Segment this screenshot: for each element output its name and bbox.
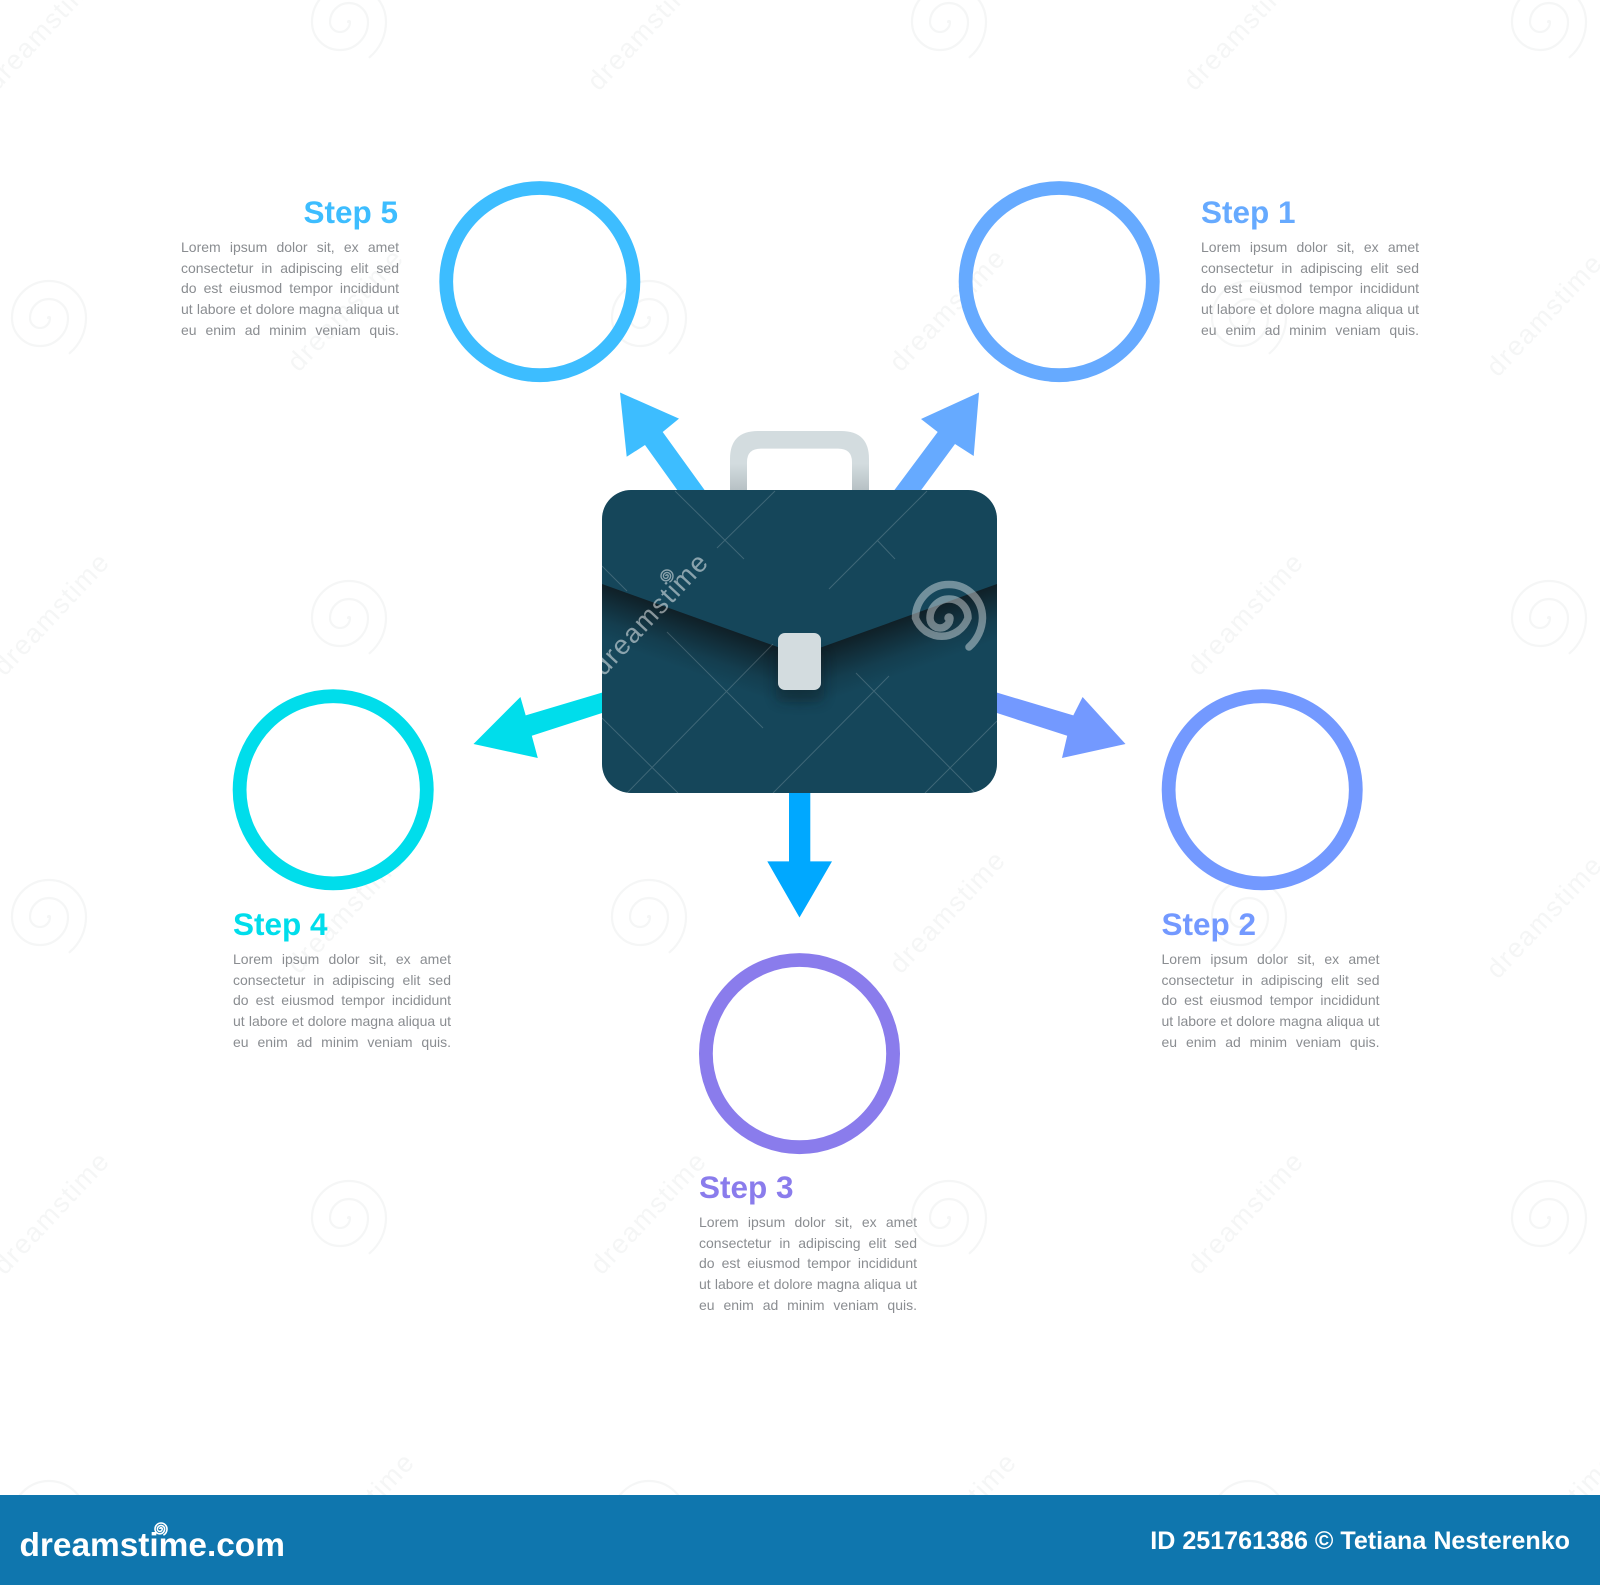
body: step 3: Lorem ipsum dolor sit, ex amet: [699, 1214, 917, 1230]
footer logo text: dreamstime.com: [20, 1527, 285, 1564]
background watermark text: dreamstime: [281, 845, 410, 979]
body: step 3: [699, 1214, 917, 1313]
body: step 2: consectetur in adipiscing elit sed: [1162, 972, 1380, 988]
body: step 5: do est eiusmod tempor incididunt: [181, 280, 399, 296]
body: step 4: [233, 951, 451, 1050]
arrow: to step 4: [474, 692, 604, 758]
footer logo spiral: [154, 1522, 168, 1536]
body: step 4: ut labore et dolore magna aliqua ut: [233, 1013, 451, 1029]
arrow: to step 2: [995, 692, 1126, 758]
body: step 2: Lorem ipsum dolor sit, ex amet: [1162, 951, 1380, 967]
text block: step 5: [181, 194, 399, 338]
body: step 5: ut labore et dolore magna aliqua ut: [181, 301, 399, 317]
background watermark text: dreamstime: [894, 1447, 1023, 1581]
background watermark text: dreamstime: [883, 845, 1012, 979]
body: step 4: consectetur in adipiscing elit sed: [233, 972, 451, 988]
body: step 1: Lorem ipsum dolor sit, ex amet: [1201, 239, 1419, 255]
body: step 2: do est eiusmod tempor incididunt: [1162, 992, 1380, 1008]
body: step 5: eu enim ad minim veniam quis.: [181, 322, 399, 338]
background watermark text: dreamstime: [1181, 1146, 1310, 1280]
background watermark text: dreamstime: [883, 243, 1012, 377]
briefcase watermark lines: [602, 491, 997, 793]
briefcase watermark spiral: [916, 584, 982, 647]
circle: step 2: [1169, 696, 1356, 883]
heading: step 3: Step 3: [699, 1169, 794, 1205]
briefcase body: [602, 490, 997, 793]
text block: step 1: [1201, 194, 1419, 338]
body: step 2: ut labore et dolore magna aliqua ut: [1162, 1013, 1380, 1029]
background watermark text: dreamstime: [1181, 547, 1310, 681]
body: step 4: eu enim ad minim veniam quis.: [233, 1034, 451, 1050]
body: step 1: do est eiusmod tempor incididunt: [1201, 280, 1419, 296]
body: step 5: Lorem ipsum dolor sit, ex amet: [181, 239, 399, 255]
body: step 1: ut labore et dolore magna aliqua ut: [1201, 301, 1419, 317]
circle: step 4: [240, 696, 427, 883]
text block: step 2: [1162, 906, 1380, 1050]
body: step 1: [1201, 239, 1419, 338]
briefcase flap shadow: [602, 584, 997, 686]
briefcase watermark small spiral: [661, 570, 673, 582]
body: step 3: eu enim ad minim veniam quis.: [699, 1297, 917, 1313]
circle: step 1: [966, 188, 1153, 375]
briefcase clasp shadow: [776, 650, 824, 702]
heading: step 4: Step 4: [233, 906, 328, 942]
background watermark text: dreamstime: [292, 1447, 421, 1581]
footer credit: ID 251761386 © Tetiana Nesterenko: [1150, 1527, 1570, 1555]
background watermark text: dreamstime: [584, 1146, 713, 1280]
body: step 3: do est eiusmod tempor incididunt: [699, 1255, 917, 1271]
body: step 2: eu enim ad minim veniam quis.: [1162, 1034, 1380, 1050]
text block: step 4: [233, 906, 451, 1050]
background watermark text: dreamstime: [281, 243, 410, 377]
briefcase clasp: [778, 633, 821, 690]
briefcase handle: [730, 431, 869, 492]
body: step 2: [1162, 951, 1380, 1050]
heading: step 5: Step 5: [303, 194, 398, 230]
briefcase watermark text: dreamstime: [586, 547, 715, 681]
circle: step 3: [706, 960, 893, 1147]
body: step 5: consectetur in adipiscing elit sed: [181, 260, 399, 276]
heading: step 2: Step 2: [1162, 906, 1256, 942]
footer bar: [0, 1495, 1600, 1585]
arrow: to step 1: [893, 392, 979, 492]
arrow: to step 5: [620, 392, 706, 492]
body: step 1: eu enim ad minim veniam quis.: [1201, 322, 1419, 338]
heading: step 1: Step 1: [1201, 194, 1296, 230]
body: step 4: do est eiusmod tempor incididunt: [233, 992, 451, 1008]
body: step 3: ut labore et dolore magna aliqua ut: [699, 1276, 917, 1292]
icon: briefcase: [586, 431, 997, 793]
circle: step 5: [446, 188, 633, 375]
body: step 4: Lorem ipsum dolor sit, ex amet: [233, 951, 451, 967]
text block: step 3: [699, 1169, 917, 1313]
arrow: to step 3: [767, 790, 832, 918]
body: step 3: consectetur in adipiscing elit sed: [699, 1235, 917, 1251]
body: step 1: consectetur in adipiscing elit sed: [1201, 260, 1419, 276]
body: step 5: [181, 239, 399, 338]
